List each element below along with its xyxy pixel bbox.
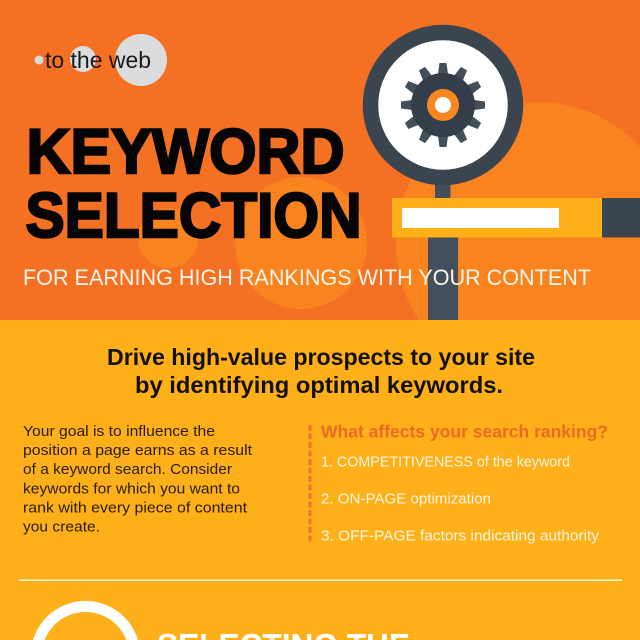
heading: what affects your search ranking: What affects your search ranking? xyxy=(321,422,608,442)
list: ranking factors: 2. ON-PAGE optimization xyxy=(321,490,491,508)
heading: drive prospects xyxy=(107,344,535,398)
text block: goal: rank with every piece of content xyxy=(23,500,248,516)
icon: white ring xyxy=(33,601,138,640)
heading: drive prospects: Drive high-value prospects to your site xyxy=(107,344,535,370)
subtitle: FOR EARNING HIGH RANKINGS WITH YOUR CONTENT xyxy=(23,265,591,290)
text block: goal: of a keyword search. Consider xyxy=(23,461,232,478)
icon: search bar xyxy=(392,198,640,238)
icon: search bar handle xyxy=(428,237,458,320)
logo: to the web: to the web xyxy=(45,47,151,73)
text block: goal xyxy=(23,423,253,536)
panel: yellow content xyxy=(0,320,640,640)
icon: magnifying glass with gear xyxy=(370,32,516,200)
text block: goal: position a page earns as a result xyxy=(23,442,253,459)
logo: to the web xyxy=(34,34,167,86)
list: ranking factors xyxy=(321,454,600,544)
divider line xyxy=(19,580,622,581)
title: SELECTION xyxy=(26,181,362,251)
text block: goal: you create. xyxy=(23,518,100,536)
text block: goal: Your goal is to influence the xyxy=(23,423,215,440)
title: KEYWORD xyxy=(26,117,344,187)
title xyxy=(26,117,362,251)
text block: goal: keywords for which you want to xyxy=(23,480,240,498)
dashed divider xyxy=(308,425,312,543)
heading: drive prospects: by identifying optimal keywords. xyxy=(135,372,503,398)
panel: orange header xyxy=(0,0,640,320)
background circles xyxy=(138,102,640,320)
icon: gear xyxy=(401,63,485,147)
list: ranking factors: 1. COMPETITIVENESS of the keyword xyxy=(321,454,570,470)
list: ranking factors: 3. OFF-PAGE factors indicating authority xyxy=(321,528,600,544)
